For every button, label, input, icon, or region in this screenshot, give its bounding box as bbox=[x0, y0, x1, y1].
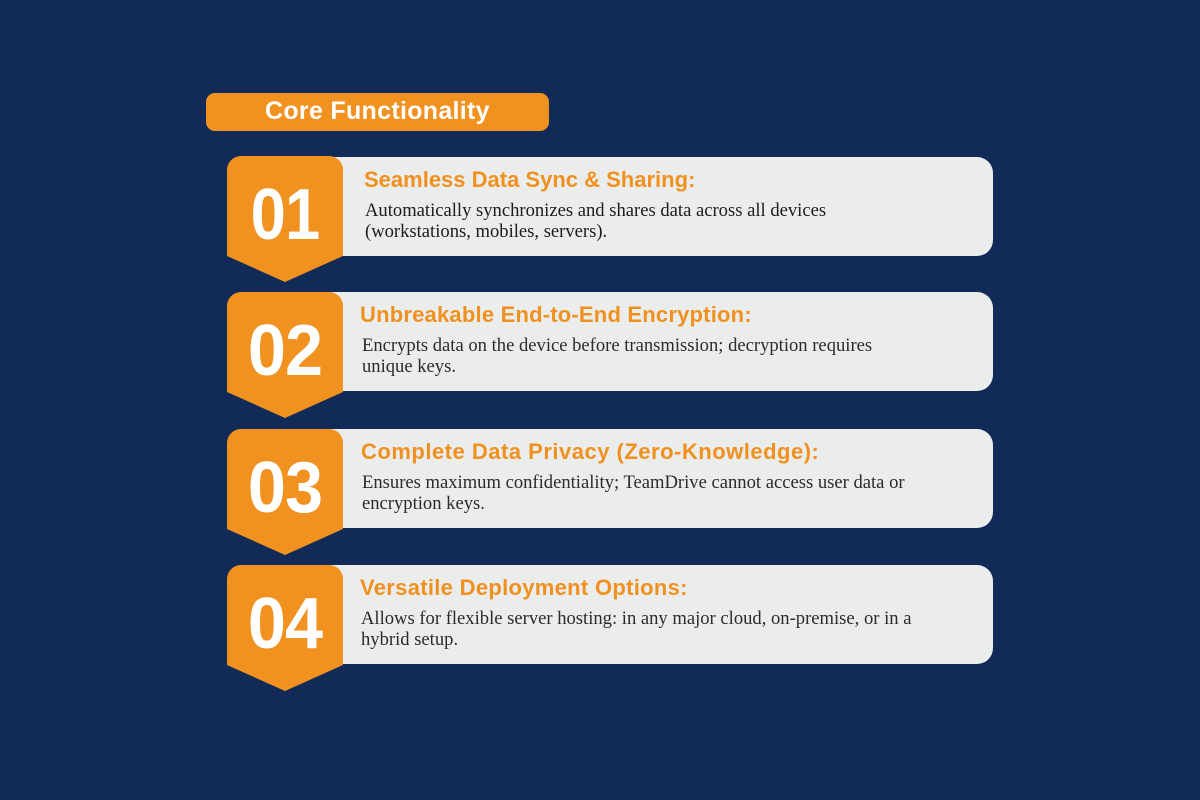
description 03 bbox=[362, 472, 905, 514]
description 03: encryption keys. bbox=[362, 493, 485, 514]
card 03 bbox=[300, 429, 993, 528]
heading 04: Versatile Deployment Options: bbox=[360, 575, 688, 600]
description 01: Automatically synchronizes and shares data across all devices bbox=[365, 200, 826, 221]
badge 04 bbox=[227, 565, 343, 691]
description 02 bbox=[362, 335, 872, 377]
title banner bbox=[206, 93, 549, 131]
panel: item 02 bbox=[227, 292, 993, 418]
card 04 bbox=[300, 565, 993, 664]
description 04: Allows for flexible server hosting: in any major cloud, on-premise, or in a bbox=[361, 608, 911, 629]
heading 03: Complete Data Privacy (Zero-Knowledge): bbox=[361, 439, 819, 464]
card 02 bbox=[300, 292, 993, 391]
number 03: 03 bbox=[248, 448, 322, 528]
number 02: 02 bbox=[248, 311, 322, 391]
panel: item 01 bbox=[227, 156, 993, 282]
title text: Core Functionality bbox=[265, 97, 490, 125]
panel: item 03 bbox=[227, 429, 993, 555]
number 04: 04 bbox=[248, 584, 322, 664]
description 01: (workstations, mobiles, servers). bbox=[365, 221, 607, 242]
heading 01: Seamless Data Sync & Sharing: bbox=[364, 167, 695, 192]
description 03: Ensures maximum confidentiality; TeamDrive cannot access user data or bbox=[362, 472, 905, 493]
badge 02 bbox=[227, 292, 343, 418]
description 04: hybrid setup. bbox=[361, 629, 458, 650]
number 01: 01 bbox=[251, 175, 319, 255]
badge 03 bbox=[227, 429, 343, 555]
badge 01 bbox=[227, 156, 343, 282]
description 04 bbox=[361, 608, 912, 650]
description 01 bbox=[365, 200, 826, 242]
panel: item 04 bbox=[227, 565, 993, 691]
heading 02: Unbreakable End-to-End Encryption: bbox=[360, 302, 752, 327]
card 01 bbox=[300, 157, 993, 256]
description 02: unique keys. bbox=[362, 356, 456, 377]
description 02: Encrypts data on the device before transmission; decryption requires bbox=[362, 335, 872, 356]
